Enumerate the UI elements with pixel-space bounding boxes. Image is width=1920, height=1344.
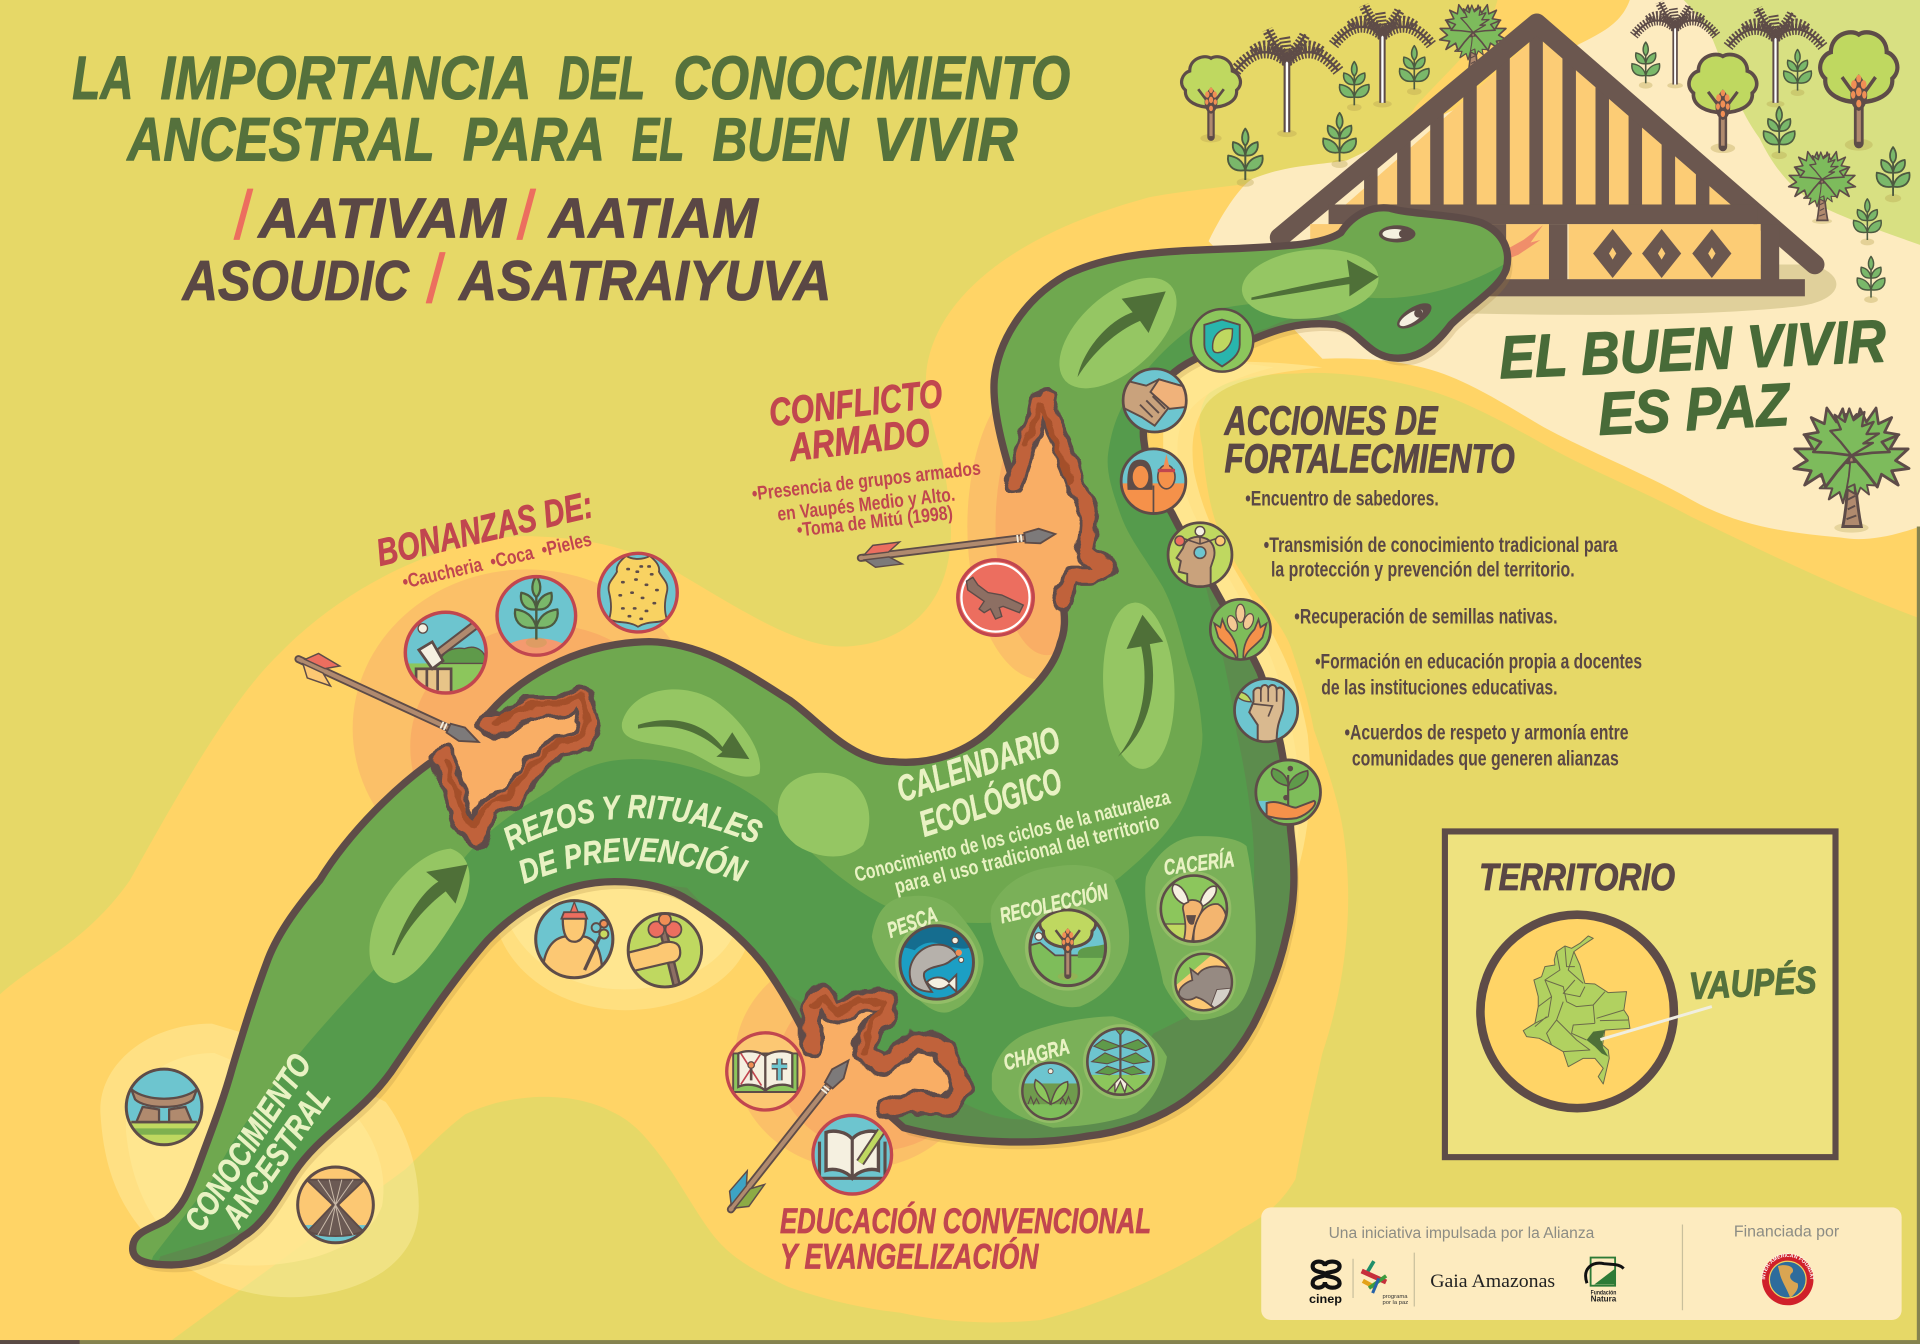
wound: education xyxy=(812,994,961,1108)
wound: bonanzas xyxy=(443,694,590,836)
vaupés label: VAUPÉS xyxy=(1688,958,1817,1008)
title: BUEN xyxy=(713,105,850,173)
logo: programa por la paz: por la paz xyxy=(1382,1300,1408,1306)
actions list: •Transmisión de conocimiento tradicional para xyxy=(1264,534,1618,557)
initiative label: Una iniciativa impulsada por la Alianza xyxy=(1329,1225,1594,1242)
vaupés pointer xyxy=(1600,1007,1712,1040)
leaf blob: hump arrow xyxy=(622,689,760,777)
title: PARA xyxy=(463,105,605,173)
snake tongue xyxy=(1504,225,1543,260)
rituals label: REZOS Y RITUALES xyxy=(504,794,763,851)
snake body xyxy=(129,204,1512,1269)
actions list xyxy=(1245,488,1642,770)
title: VIVIR xyxy=(873,105,1018,173)
arrow: armed conflict xyxy=(859,523,1057,569)
actions list: de las instituciones educativas. xyxy=(1321,676,1558,699)
icon: bonanza, coca plant xyxy=(495,574,578,657)
eco calendar blobs xyxy=(872,836,1256,1128)
wound halo: bonanzas xyxy=(353,569,700,888)
logo: cinep: cinep xyxy=(1309,1293,1342,1306)
logo: programa por la paz xyxy=(1362,1261,1408,1306)
wound halo: armed conflict xyxy=(967,373,1114,680)
heading: el buen vivir es paz xyxy=(1498,307,1887,448)
icon: gathering xyxy=(1025,899,1111,991)
big palm lower right xyxy=(1789,393,1914,533)
subtitle in local languages: / xyxy=(234,177,254,254)
wound strips xyxy=(443,398,1108,1108)
conflict list: •Toma de Mitú (1998) xyxy=(796,502,954,542)
actions list: •Acuerdos de respeto y armonía entre xyxy=(1344,722,1629,745)
leaf blob: plain xyxy=(778,773,869,856)
title: ANCESTRAL xyxy=(126,105,435,173)
arrow: education xyxy=(721,1053,858,1217)
conflict heading: ARMADO xyxy=(786,411,932,470)
title: LA xyxy=(72,44,133,112)
icon: fishing xyxy=(895,921,978,1004)
vegetation around the house xyxy=(1182,0,1910,303)
title: IMPORTANCIA xyxy=(160,44,531,112)
glow around tail icons xyxy=(100,1024,419,1297)
ecological calendar label: Conocimiento de los ciclos de la naturaleza xyxy=(852,786,1173,887)
icon: chagra sprout xyxy=(1019,1059,1083,1123)
title: DEL xyxy=(558,44,645,112)
lower wall xyxy=(1310,224,1549,279)
leaf blob: lower arrow xyxy=(369,849,470,983)
actions list: •Encuentro de sabedores. xyxy=(1245,488,1439,511)
education heading xyxy=(780,1201,1151,1277)
logo: programa por la paz: programa xyxy=(1382,1294,1408,1300)
icon: handshake xyxy=(1121,369,1188,432)
conflict list: en Vaupés Medio y Alto. xyxy=(776,484,956,526)
bonanzas heading: BONANZAS DE: xyxy=(373,484,597,575)
conflict heading xyxy=(767,373,945,470)
arrow: bonanzas xyxy=(293,647,484,754)
title: EL xyxy=(632,105,684,173)
ecological calendar label: CALENDARIO xyxy=(891,719,1065,810)
ancestral knowledge label: ANCESTRAL xyxy=(215,1080,338,1235)
conflict list: •Presencia de grupos armados xyxy=(751,457,982,505)
subtitle in local languages: / xyxy=(517,177,537,254)
leaf blob: body arrow xyxy=(1103,602,1174,769)
icon: woven hourglass xyxy=(298,1167,373,1245)
eco activity labels xyxy=(884,846,1236,1075)
ecological calendar label xyxy=(852,719,1173,899)
background: light green corner xyxy=(1684,0,1920,245)
blob: cacería xyxy=(1145,836,1256,1020)
icon: ancestral bench xyxy=(126,1069,202,1149)
icon: shaman xyxy=(536,901,613,980)
icon: bonanza, hide xyxy=(599,553,677,632)
wound halo: education xyxy=(735,949,980,1169)
ancestral knowledge label: CONOCIMIENTO xyxy=(177,1047,319,1238)
leaf blob: neck arrow xyxy=(1060,278,1176,388)
icon: seeds in hands xyxy=(1210,599,1271,660)
title xyxy=(72,44,1070,173)
wound: armed conflict xyxy=(1014,398,1108,602)
diamonds xyxy=(1593,229,1731,278)
map of Colombia xyxy=(1523,936,1630,1084)
ecological calendar label: para el uso tradicional del territorio xyxy=(892,810,1162,899)
glow around ritual icons xyxy=(493,882,749,1010)
subtitle in local languages: ASOUDIC xyxy=(181,249,410,312)
logo: cinep xyxy=(1309,1262,1342,1306)
subtitle in local languages: ASATRAIYUVA xyxy=(457,249,831,312)
icon: raised fist xyxy=(1235,679,1298,742)
eco activity labels: CACERÍA xyxy=(1162,846,1236,880)
logo: fundación natura: Natura xyxy=(1591,1295,1617,1304)
gable stripes xyxy=(1346,36,1730,204)
map circle xyxy=(1480,915,1674,1108)
eco activity labels: CHAGRA xyxy=(1001,1034,1072,1075)
actions heading: ACCIONES DE xyxy=(1224,398,1438,444)
icon: elders xyxy=(1119,449,1188,516)
bottom edge strip xyxy=(0,527,1920,1344)
education heading: Y EVANGELIZACIÓN xyxy=(780,1237,1039,1277)
house (maloca) xyxy=(1280,18,1836,315)
rituals label xyxy=(504,794,763,884)
conflict heading: CONFLICTO xyxy=(767,373,945,435)
education heading: EDUCACIÓN CONVENCIONAL xyxy=(780,1201,1151,1241)
subtitle in local languages: AATIAM xyxy=(547,187,759,250)
snake body shadow xyxy=(138,215,1512,1272)
ecological calendar label: ECOLÓGICO xyxy=(914,760,1067,845)
territory heading: TERRITORIO xyxy=(1479,857,1675,899)
blob: recolección xyxy=(991,865,1129,1007)
subtitle in local languages xyxy=(181,177,831,317)
conflict list xyxy=(751,457,982,542)
actions list: la protección y prevención del territorio. xyxy=(1271,559,1575,582)
icon: rifle xyxy=(958,560,1033,635)
rituals label: DE PREVENCIÓN xyxy=(519,838,750,884)
glow beside the actions column xyxy=(1163,362,1322,869)
icon: chagra yuca xyxy=(1083,1024,1158,1099)
icon: hand with sprout xyxy=(1256,760,1320,825)
logo: fundación natura: Fundación xyxy=(1591,1289,1616,1296)
subtitle in local languages: AATIVAM xyxy=(256,187,507,250)
icon: deer xyxy=(1156,871,1231,946)
logo: inter-american foundation: INTER-AMERICAN FOUNDATION xyxy=(1762,1253,1814,1280)
actions heading: FORTALECMIENTO xyxy=(1224,436,1515,482)
house shadow xyxy=(1469,264,1836,315)
icon: tapir xyxy=(1172,950,1236,1014)
background: cream clearing around the house xyxy=(1209,0,1920,539)
eco activity labels: RECOLECCIÓN xyxy=(997,879,1111,928)
blob: chagra xyxy=(992,1016,1167,1128)
icon: shield xyxy=(1191,309,1253,372)
arrows on the snake xyxy=(392,260,1379,955)
roof xyxy=(1280,23,1815,264)
bonanzas list: •Caucheria •Coca •Pieles xyxy=(400,529,594,594)
snake eyes xyxy=(1379,225,1435,334)
subtitle in local languages: / xyxy=(426,240,446,317)
panel: territorio xyxy=(1445,831,1836,1157)
title: CONOCIMIENTO xyxy=(673,44,1070,112)
actions list: comunidades que generen alianzas xyxy=(1352,747,1619,770)
actions list: •Recuperación de semillas nativas. xyxy=(1294,605,1558,628)
leaf blob: head arrow xyxy=(1242,249,1378,319)
icon: ritual staff xyxy=(628,913,702,987)
logo: fundación natura xyxy=(1586,1258,1624,1304)
icon: book with pencil xyxy=(813,1115,892,1194)
blob: pesca xyxy=(872,896,984,1013)
logo: gaia amazonas: Gaia Amazonas xyxy=(1430,1271,1555,1292)
funded label: Financiada por xyxy=(1734,1224,1840,1241)
eco activity labels: PESCA xyxy=(884,902,941,943)
icon: bonanza, deforestation xyxy=(405,612,486,696)
actions heading xyxy=(1224,398,1515,482)
heading: el buen vivir es paz: ES PAZ xyxy=(1596,371,1793,448)
icon: knowledge head xyxy=(1168,523,1232,587)
actions list: •Formación en educación propia a docentes xyxy=(1315,651,1642,674)
icon: book with cross xyxy=(727,1033,804,1110)
